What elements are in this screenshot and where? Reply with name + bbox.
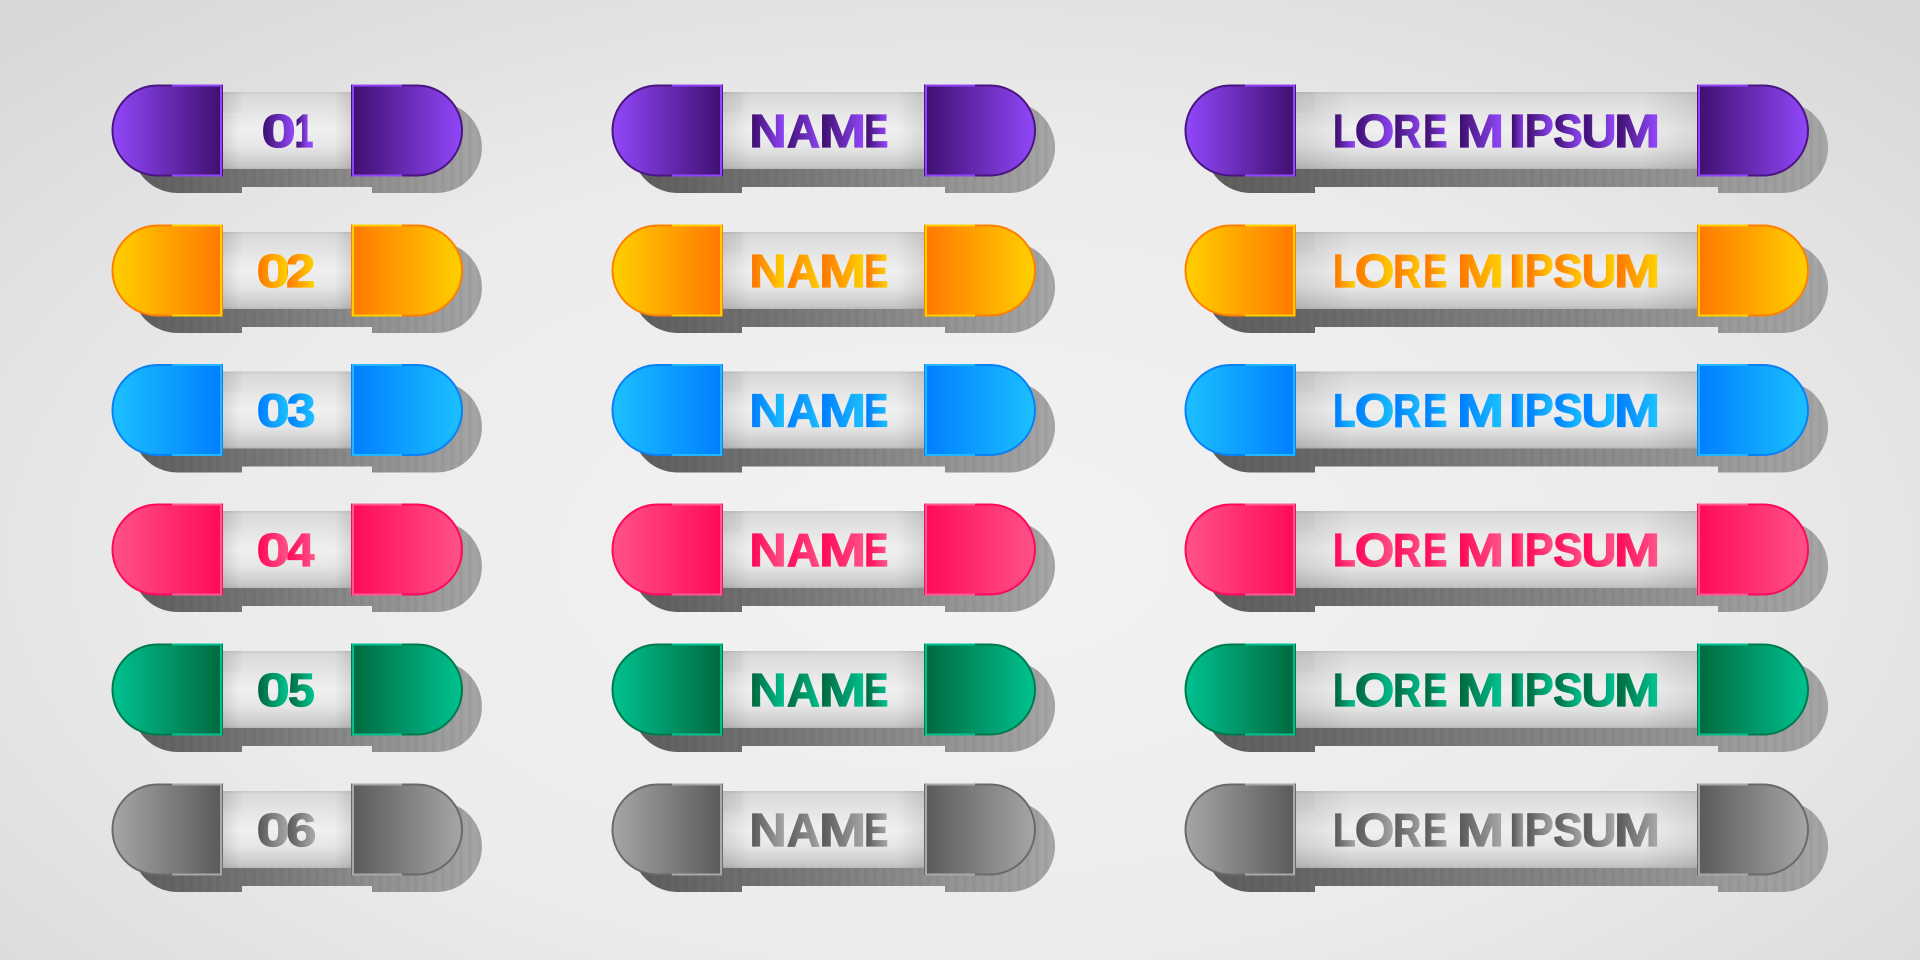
- label LORE M IPSUM: L: [1333, 105, 1356, 157]
- label 05: 0: [257, 664, 290, 716]
- label NAME: E: [864, 664, 888, 716]
- right cap: [925, 504, 1035, 594]
- right cap: [925, 365, 1035, 455]
- label LORE M IPSUM: O: [1355, 245, 1394, 297]
- right cap: [352, 226, 462, 316]
- label NAME: N: [749, 105, 787, 157]
- label LORE M IPSUM: P: [1525, 664, 1554, 716]
- center bar: [722, 651, 925, 728]
- label LORE M IPSUM: E: [1423, 664, 1447, 716]
- label LORE M IPSUM: M: [1614, 384, 1660, 436]
- label LORE M IPSUM: U: [1582, 245, 1616, 297]
- banner LOREM IPSUM: pink: [1186, 504, 1828, 612]
- banner LOREM IPSUM: purple: [1186, 86, 1828, 193]
- drop shadow: [132, 102, 482, 193]
- center bar: [722, 232, 925, 309]
- label LORE M IPSUM: U: [1582, 664, 1616, 716]
- left cap: [612, 226, 722, 316]
- label NAME: N: [749, 664, 787, 716]
- label NAME: M: [819, 664, 866, 716]
- label 04: 0: [257, 524, 290, 576]
- label LORE M IPSUM: P: [1525, 105, 1554, 157]
- label 06: 6: [286, 804, 316, 856]
- left cap: [1186, 226, 1295, 316]
- center bar: [722, 791, 925, 868]
- label LORE M IPSUM: S: [1553, 105, 1583, 157]
- right cap: [1698, 86, 1808, 176]
- label NAME: N: [749, 524, 787, 576]
- left cap: [1186, 784, 1295, 874]
- right cap: [352, 644, 462, 734]
- banner 04: pink number: [112, 504, 482, 612]
- banner NAME: green: [612, 644, 1055, 752]
- banner 06: gray number: [112, 784, 482, 892]
- label LORE M IPSUM: S: [1553, 524, 1583, 576]
- left cap: [612, 644, 722, 734]
- drop shadow: [1205, 242, 1828, 333]
- label LORE M IPSUM: O: [1355, 105, 1394, 157]
- drop shadow: [632, 102, 1055, 193]
- label LORE M IPSUM: M: [1457, 105, 1504, 157]
- label NAME: M: [819, 384, 866, 436]
- label 03: 0: [257, 384, 290, 436]
- label LORE M IPSUM: O: [1355, 384, 1394, 436]
- label LORE M IPSUM: P: [1525, 524, 1554, 576]
- label NAME: E: [864, 804, 888, 856]
- label NAME: A: [787, 524, 820, 576]
- banner LOREM IPSUM: gray: [1186, 784, 1828, 892]
- banner LOREM IPSUM: green: [1186, 644, 1828, 752]
- right cap: [925, 86, 1035, 176]
- left cap: [112, 86, 222, 176]
- label LORE M IPSUM: E: [1423, 105, 1447, 157]
- label LORE M IPSUM: P: [1525, 384, 1554, 436]
- label LORE M IPSUM: R: [1393, 804, 1421, 856]
- label LORE M IPSUM: S: [1553, 245, 1583, 297]
- label LORE M IPSUM: M: [1457, 804, 1504, 856]
- label LORE M IPSUM: R: [1393, 524, 1421, 576]
- drop shadow: [1205, 661, 1828, 752]
- label LORE M IPSUM: O: [1355, 804, 1394, 856]
- center bar: [722, 92, 925, 169]
- right cap: [1698, 784, 1808, 874]
- label LORE M IPSUM: L: [1333, 384, 1356, 436]
- label NAME: N: [749, 384, 787, 436]
- left cap: [1186, 86, 1295, 176]
- label LORE M IPSUM: L: [1333, 804, 1356, 856]
- label LORE M IPSUM: M: [1614, 105, 1660, 157]
- left cap: [1186, 504, 1295, 594]
- center bar: [222, 791, 352, 868]
- left cap: [612, 504, 722, 594]
- left cap: [112, 784, 222, 874]
- label LORE M IPSUM: S: [1553, 664, 1583, 716]
- drop shadow: [632, 801, 1055, 892]
- label NAME: M: [819, 804, 866, 856]
- left cap: [612, 365, 722, 455]
- label LORE M IPSUM: O: [1355, 664, 1394, 716]
- label NAME: A: [787, 105, 820, 157]
- label LORE M IPSUM: I: [1508, 384, 1526, 436]
- center bar: [222, 232, 352, 309]
- label LORE M IPSUM: M: [1457, 245, 1504, 297]
- center bar: [222, 651, 352, 728]
- label LORE M IPSUM: I: [1508, 664, 1526, 716]
- drop shadow: [1205, 382, 1828, 472]
- center bar: [222, 511, 352, 588]
- right cap: [1698, 504, 1808, 594]
- label LORE M IPSUM: U: [1582, 384, 1616, 436]
- label LORE M IPSUM: I: [1508, 804, 1526, 856]
- banner LOREM IPSUM: orange: [1186, 226, 1828, 333]
- label LORE M IPSUM: I: [1508, 524, 1526, 576]
- left cap: [112, 365, 222, 455]
- center bar: [722, 511, 925, 588]
- label NAME: A: [787, 384, 820, 436]
- drop shadow: [132, 242, 482, 333]
- left cap: [112, 644, 222, 734]
- center bar: [222, 92, 352, 169]
- label LORE M IPSUM: M: [1457, 524, 1504, 576]
- drop shadow: [132, 382, 482, 472]
- drop shadow: [132, 521, 482, 612]
- center bar: [1295, 92, 1698, 169]
- right cap: [352, 504, 462, 594]
- right cap: [352, 86, 462, 176]
- label LORE M IPSUM: I: [1508, 105, 1526, 157]
- label LORE M IPSUM: M: [1614, 804, 1660, 856]
- drop shadow: [1205, 801, 1828, 892]
- label LORE M IPSUM: U: [1582, 105, 1616, 157]
- banner NAME: pink: [612, 504, 1055, 612]
- left cap: [1186, 365, 1295, 455]
- center bar: [222, 372, 352, 448]
- label LORE M IPSUM: M: [1457, 664, 1504, 716]
- label LORE M IPSUM: L: [1333, 524, 1356, 576]
- label NAME: N: [749, 245, 787, 297]
- label LORE M IPSUM: E: [1423, 384, 1447, 436]
- right cap: [925, 226, 1035, 316]
- center bar: [722, 372, 925, 448]
- label LORE M IPSUM: S: [1553, 804, 1583, 856]
- center bar: [1295, 511, 1698, 588]
- label 05: 5: [288, 664, 315, 716]
- drop shadow: [1205, 102, 1828, 193]
- label NAME: M: [819, 245, 866, 297]
- left cap: [1186, 644, 1295, 734]
- label LORE M IPSUM: E: [1423, 524, 1447, 576]
- label LORE M IPSUM: M: [1614, 524, 1660, 576]
- label 03: 3: [287, 384, 315, 436]
- right cap: [1698, 365, 1808, 455]
- label LORE M IPSUM: P: [1525, 245, 1554, 297]
- drop shadow: [632, 521, 1055, 612]
- banner NAME: purple: [612, 86, 1055, 193]
- label NAME: A: [787, 245, 820, 297]
- banner 02: orange number: [112, 226, 482, 333]
- label LORE M IPSUM: R: [1393, 245, 1421, 297]
- label NAME: E: [864, 524, 888, 576]
- center bar: [1295, 651, 1698, 728]
- left cap: [612, 86, 722, 176]
- center bar: [1295, 232, 1698, 309]
- center bar: [1295, 791, 1698, 868]
- label LORE M IPSUM: R: [1393, 664, 1421, 716]
- right cap: [352, 365, 462, 455]
- banner 01: purple number: [112, 86, 482, 193]
- label LORE M IPSUM: E: [1423, 245, 1447, 297]
- drop shadow: [632, 661, 1055, 752]
- label NAME: E: [864, 384, 888, 436]
- label LORE M IPSUM: M: [1457, 384, 1504, 436]
- label NAME: E: [864, 245, 888, 297]
- label NAME: M: [819, 105, 866, 157]
- label 01: 0: [262, 105, 296, 157]
- right cap: [925, 784, 1035, 874]
- label LORE M IPSUM: U: [1582, 804, 1616, 856]
- banner NAME: orange: [612, 226, 1055, 333]
- banner NAME: gray: [612, 784, 1055, 892]
- label LORE M IPSUM: R: [1393, 384, 1421, 436]
- label LORE M IPSUM: S: [1553, 384, 1583, 436]
- label NAME: M: [819, 524, 866, 576]
- label 02: 2: [286, 245, 315, 297]
- label LORE M IPSUM: U: [1582, 524, 1616, 576]
- banner 05: green number: [112, 644, 482, 752]
- label LORE M IPSUM: O: [1355, 524, 1394, 576]
- label LORE M IPSUM: I: [1508, 245, 1526, 297]
- label LORE M IPSUM: L: [1333, 245, 1356, 297]
- left cap: [112, 226, 222, 316]
- drop shadow: [132, 661, 482, 752]
- right cap: [1698, 226, 1808, 316]
- right cap: [925, 644, 1035, 734]
- label LORE M IPSUM: L: [1333, 664, 1356, 716]
- label LORE M IPSUM: E: [1423, 804, 1447, 856]
- label NAME: A: [787, 664, 820, 716]
- banner LOREM IPSUM: blue: [1186, 365, 1828, 472]
- drop shadow: [1205, 521, 1828, 612]
- center bar: [1295, 372, 1698, 448]
- label 04: 4: [287, 524, 314, 576]
- label NAME: E: [864, 105, 888, 157]
- drop shadow: [632, 242, 1055, 333]
- right cap: [352, 784, 462, 874]
- right cap: [1698, 644, 1808, 734]
- label NAME: N: [749, 804, 787, 856]
- banner NAME: blue: [612, 365, 1055, 472]
- drop shadow: [132, 801, 482, 892]
- left cap: [612, 784, 722, 874]
- banner 03: blue number: [112, 365, 482, 472]
- label NAME: A: [787, 804, 820, 856]
- label LORE M IPSUM: P: [1525, 804, 1554, 856]
- label LORE M IPSUM: M: [1614, 245, 1660, 297]
- label LORE M IPSUM: M: [1614, 664, 1660, 716]
- label 01: 1: [295, 105, 313, 157]
- label 02: 0: [257, 245, 290, 297]
- drop shadow: [632, 382, 1055, 472]
- left cap: [112, 504, 222, 594]
- label 06: 0: [257, 804, 290, 856]
- label LORE M IPSUM: R: [1393, 105, 1421, 157]
